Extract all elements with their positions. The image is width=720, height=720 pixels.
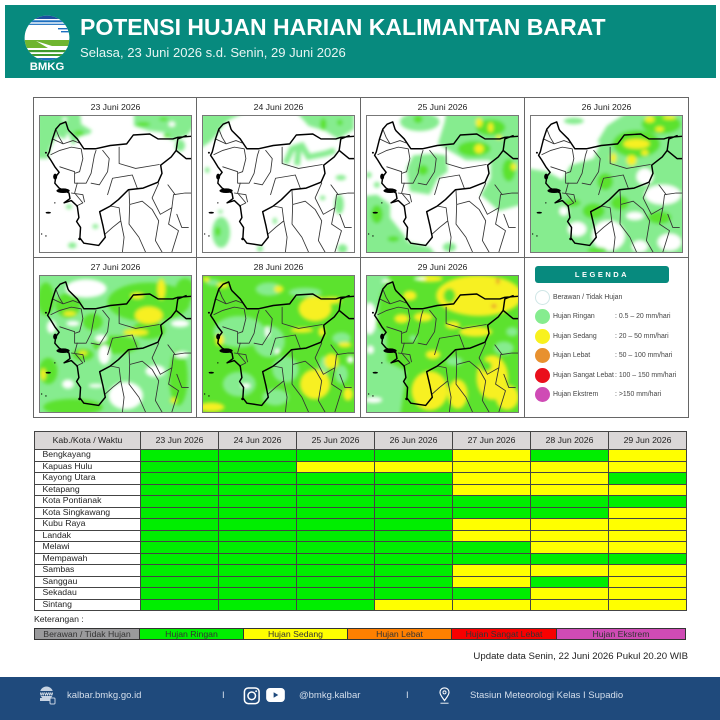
table: rainfall per regency and date	[34, 431, 687, 611]
category colour key bar: Hujan Lebat	[376, 629, 423, 639]
legend item: berawan	[535, 290, 622, 305]
panel: map 25 Juni 2026: 25 Juni 2026	[418, 102, 467, 112]
header banner	[5, 5, 716, 78]
category colour key bar	[34, 628, 686, 640]
legend item: lebat: Hujan Lebat	[553, 352, 590, 359]
row: Bengkayang	[35, 450, 686, 461]
row: Sanggau	[35, 576, 686, 587]
panel: map 23 Juni 2026: 23 Juni 2026	[91, 102, 140, 112]
row: Sekadau	[35, 588, 686, 599]
legend item: berawan: Berawan / Tidak Hujan	[553, 294, 622, 301]
table header row: 27 Jun 2026	[468, 435, 515, 445]
row: Mempawah	[35, 554, 686, 564]
legend title	[535, 266, 669, 283]
icon: instagram	[244, 687, 260, 704]
logo: BMKG	[24, 16, 70, 73]
panel: map 28 Juni 2026: 28 Juni 2026	[254, 262, 303, 272]
table header row: 29 Jun 2026	[624, 435, 671, 445]
panel: legend	[524, 257, 689, 418]
category colour key bar: Hujan Sangat Lebat	[466, 629, 542, 639]
category colour key bar: Hujan Sedang	[268, 629, 323, 639]
panel: map 24 Juni 2026: 24 Juni 2026	[254, 102, 303, 112]
icon: website: www	[39, 691, 54, 697]
logo: BMKG: BMKG	[30, 61, 64, 73]
row: Kapuas Hulu	[35, 462, 686, 472]
panel: map 26 Juni 2026: 26 Juni 2026	[582, 102, 631, 112]
separator: I	[222, 690, 225, 701]
row: Ketapang	[35, 484, 686, 495]
category colour key bar: Hujan Ekstrem	[592, 629, 649, 639]
icon: location pin	[439, 687, 450, 704]
category colour key bar: Hujan Ringan	[165, 629, 218, 639]
row: Sambas	[35, 565, 686, 576]
row: Kota Pontianak	[35, 496, 686, 507]
legend item: ekstrem: Hujan Ekstrem	[553, 391, 598, 398]
legend item: sangat lebat: Hujan Sangat Lebat	[553, 372, 614, 379]
keterangan label: Keterangan :	[34, 614, 84, 624]
legend item: ekstrem	[535, 387, 661, 402]
category colour key bar: Berawan / Tidak Hujan	[43, 629, 131, 639]
legend item: ringan	[535, 309, 671, 324]
website text: kalbar.bmkg.go.id	[67, 690, 141, 701]
table header row: 24 Jun 2026	[234, 435, 281, 445]
table header row: 28 Jun 2026	[546, 435, 593, 445]
station name: Stasiun Meteorologi Kelas I Supadio	[470, 690, 623, 701]
social handle: @bmkg.kalbar	[299, 690, 360, 701]
table header row: 23 Jun 2026	[156, 435, 203, 445]
row: Kota Singkawang	[35, 508, 686, 518]
legend item: sedang: : 20 – 50 mm/hari	[615, 333, 669, 340]
panel: map 28 Juni 2026	[196, 257, 361, 418]
row: Landak	[35, 530, 686, 541]
subtitle: date range: Selasa, 23 Juni 2026 s.d. Senin, 29 Juni 2026	[80, 45, 346, 60]
legend item: sangat lebat	[535, 368, 676, 383]
legend item: sedang: Hujan Sedang	[553, 333, 597, 340]
legend item: ringan: Hujan Ringan	[553, 313, 595, 320]
icon: website	[39, 686, 56, 704]
title: POTENSI HUJAN HARIAN KALIMANTAN BARAT	[80, 14, 606, 40]
table header row: 26 Jun 2026	[390, 435, 437, 445]
table header row	[35, 432, 686, 449]
row: Melawi	[35, 542, 686, 553]
panel: map 25 Juni 2026	[360, 97, 525, 258]
update note: Update data Senin, 22 Juni 2026 Pukul 20.20 WIB	[473, 651, 688, 662]
legend title: LEGENDA	[575, 270, 629, 279]
separator: I	[406, 690, 409, 701]
legend item: lebat	[535, 348, 672, 363]
map grid outer frame	[33, 97, 689, 418]
table header row: 25 Jun 2026	[312, 435, 359, 445]
panel: map 24 Juni 2026	[196, 97, 361, 258]
table header row: Kab./Kota / Waktu	[53, 435, 122, 445]
panel: map 29 Juni 2026	[360, 257, 525, 418]
row: Kayong Utara	[35, 473, 686, 484]
legend item: sangat lebat: : 100 – 150 mm/hari	[615, 372, 676, 379]
panel: map 27 Juni 2026	[33, 257, 198, 418]
panel: map 27 Juni 2026: 27 Juni 2026	[91, 262, 140, 272]
icon: youtube	[266, 688, 285, 702]
legend item: sedang	[535, 329, 669, 344]
panel: map 23 Juni 2026	[33, 97, 198, 258]
footer bar	[0, 677, 720, 720]
panel: map 29 Juni 2026: 29 Juni 2026	[418, 262, 467, 272]
panel: map 26 Juni 2026	[524, 97, 689, 258]
row: Sintang	[35, 600, 686, 610]
legend item: ringan: : 0.5 – 20 mm/hari	[615, 313, 671, 320]
legend item: lebat: : 50 – 100 mm/hari	[615, 352, 672, 359]
row: Kubu Raya	[35, 519, 686, 530]
legend item: ekstrem: : >150 mm/hari	[615, 391, 661, 398]
